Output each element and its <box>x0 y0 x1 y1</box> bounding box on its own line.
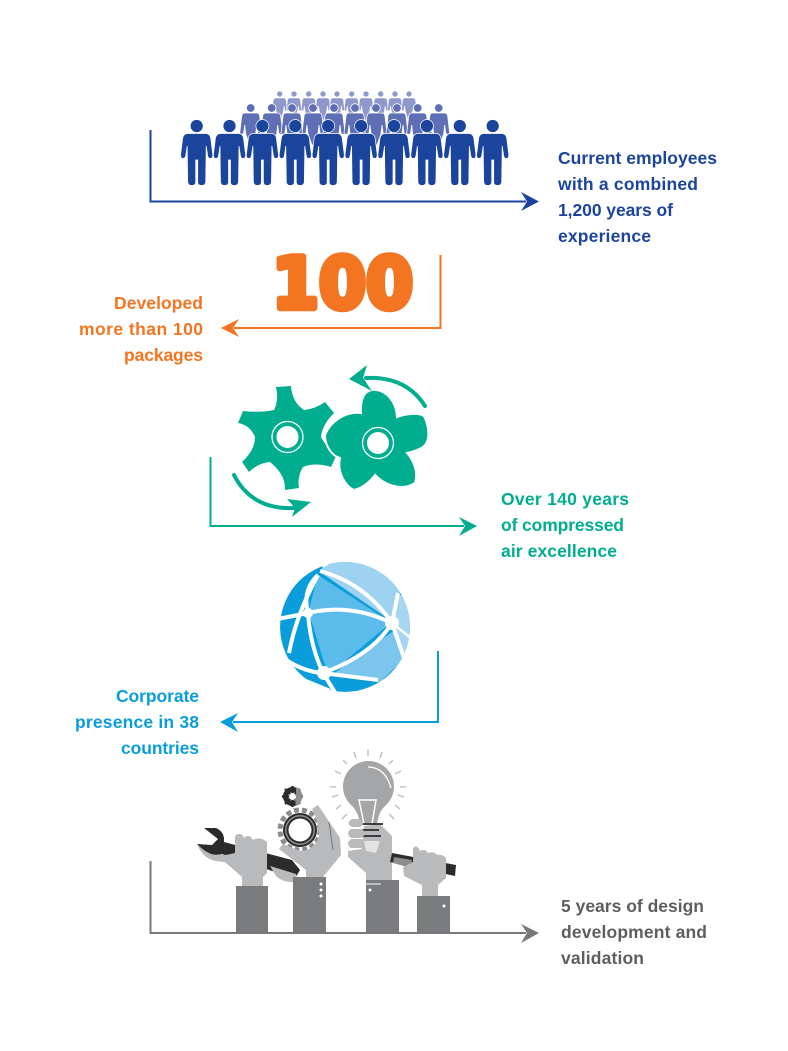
panel: employees <box>150 91 717 246</box>
text: global presence caption <box>75 686 199 758</box>
icon: wrench <box>197 828 300 882</box>
text: global presence caption: Corporate <box>116 686 199 706</box>
text: employees caption: Current employees <box>558 148 717 168</box>
panel: compressed air <box>210 365 629 561</box>
text: employees caption: with a combined <box>557 174 698 194</box>
arrow: global presence <box>220 651 438 732</box>
icon: pencil <box>390 853 456 876</box>
text: compressed air caption: of compressed <box>501 515 624 535</box>
text: employees caption <box>557 148 717 246</box>
text: employees caption: experience <box>558 226 651 246</box>
icon: large gear <box>280 810 320 850</box>
text: design and validation caption: development and <box>561 922 707 942</box>
text: packages caption: more than 100 <box>79 319 203 339</box>
text: packages caption: Developed <box>114 293 203 313</box>
text: compressed air caption <box>501 489 629 561</box>
big number 100: 100 <box>272 243 413 325</box>
panel: design and validation <box>150 750 707 968</box>
text: global presence caption: presence in 38 <box>75 712 199 732</box>
arrow: compressed air <box>210 457 477 536</box>
gear: left <box>238 386 338 490</box>
text: design and validation caption: 5 years of design <box>561 896 704 916</box>
arrow: employees <box>150 130 539 211</box>
hand: wrench <box>226 834 268 933</box>
gear: right <box>325 390 428 490</box>
icon: globe <box>280 562 410 692</box>
text: design and validation caption: validation <box>561 948 644 968</box>
hand: light bulb <box>348 819 399 933</box>
arrow: design and validation <box>150 861 539 943</box>
icon: small gear <box>282 786 303 807</box>
text: employees caption: 1,200 years of <box>558 200 673 220</box>
icon: gears <box>234 365 428 517</box>
text: packages caption: packages <box>124 345 203 365</box>
arrow: lower rotation <box>234 475 311 517</box>
panel: packages <box>79 243 440 365</box>
arrow: upper rotation <box>349 365 425 406</box>
text: packages caption <box>79 293 203 365</box>
text: global presence caption: countries <box>121 738 199 758</box>
text: design and validation caption <box>561 896 707 968</box>
panel: global presence <box>75 555 438 758</box>
text: compressed air caption: air excellence <box>501 541 617 561</box>
illustration: hands with tools <box>197 750 456 933</box>
icon: light bulb <box>330 750 406 825</box>
text: compressed air caption: Over 140 years <box>501 489 629 509</box>
arrow: packages <box>221 255 440 337</box>
hand: gear <box>279 805 341 933</box>
icon: crowd of people <box>181 91 509 186</box>
hand: pencil <box>403 847 450 933</box>
